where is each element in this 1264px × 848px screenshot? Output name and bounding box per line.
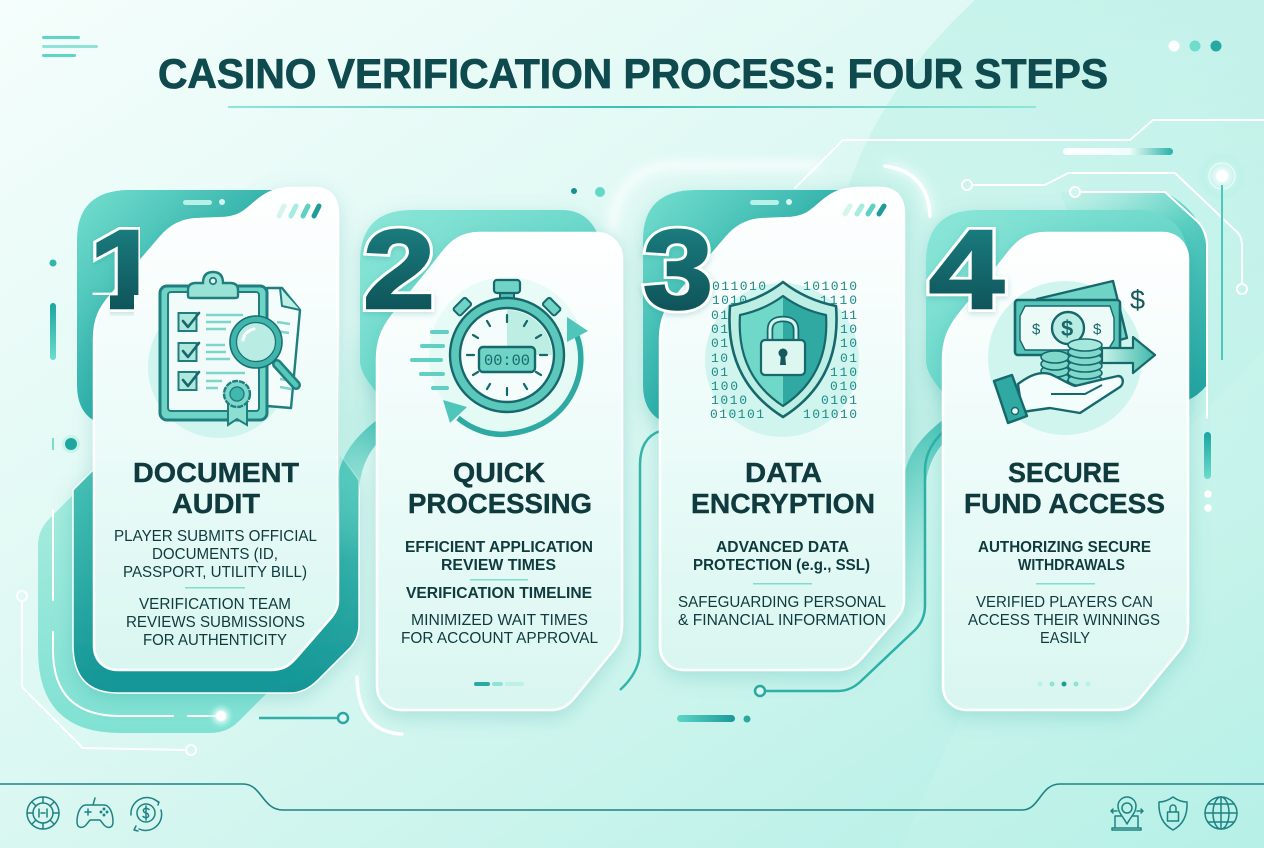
step 1 description: PASSPORT, UTILITY BILL): [123, 564, 307, 581]
step 1 dark frame: [73, 440, 359, 693]
step 2 pager: [474, 682, 524, 686]
step 3 wave soft fill: [904, 320, 951, 478]
bottom frame line: [0, 784, 1264, 810]
step 3 description: [678, 539, 886, 629]
step 1 stripes: [279, 206, 319, 216]
icon: shield with padlock and binary: 10: [840, 336, 857, 351]
step 2 back frame: [360, 210, 600, 420]
step 1 top pill: [183, 199, 225, 205]
icon: shield with padlock and binary: 1010: [712, 293, 747, 308]
icon: dollar cycle: [131, 798, 162, 831]
step 2 description: REVIEW TIMES: [441, 557, 556, 574]
icon: shield with padlock and binary: 01: [840, 351, 857, 366]
step 1 number: [92, 227, 140, 316]
step 3 top pill: [750, 199, 792, 205]
icon: shield with padlock and binary: 011010: [712, 279, 766, 294]
step 2 number: 2: [363, 207, 435, 332]
step 4 number: 4: [929, 207, 1004, 332]
step 3 heading: DATA: [745, 457, 822, 488]
step 1 description: REVIEWS SUBMISSIONS: [126, 614, 305, 631]
icon: money, coins and hand: $: [1032, 321, 1041, 338]
step 3 connector node: [755, 686, 765, 696]
left decorations: [50, 260, 80, 453]
step 1 heading: AUDIT: [172, 488, 260, 519]
bottom pill under card 3: [677, 715, 750, 722]
icon: shield with padlock and binary: 110: [830, 365, 857, 380]
icon: globe: [1205, 797, 1237, 829]
step 4 description: EASILY: [1040, 630, 1090, 647]
icon: shield with padlock and binary: 01: [711, 322, 728, 337]
icon: shield with padlock and binary: 10: [840, 322, 857, 337]
step 1 description: PLAYER SUBMITS OFFICIAL: [114, 528, 317, 545]
icon: shield with padlock and binary: 11: [841, 308, 857, 323]
step 4 number: 4: [929, 207, 1004, 332]
icon: money, coins and hand: [988, 281, 1155, 435]
step 3 card: [660, 188, 904, 670]
icon: money, coins and hand: $: [1093, 321, 1102, 338]
icon: stopwatch: 00:00: [484, 352, 530, 370]
top-right dots: [1168, 40, 1222, 52]
step 2 description: MINIMIZED WAIT TIMES: [411, 612, 588, 629]
step 3 number: 3: [643, 207, 713, 332]
step 4 description: WITHDRAWALS: [1018, 557, 1125, 574]
step 2 panel: [338, 207, 622, 710]
step 4 back frame: [926, 210, 1188, 414]
step 2 description: VERIFICATION TIMELINE: [406, 585, 592, 602]
connector: card 2 to card 3: [620, 431, 660, 690]
step 1 number: 1: [89, 207, 161, 332]
icon: shield with padlock and binary: 101010: [803, 279, 857, 294]
icon: shield with padlock and binary: 10: [711, 351, 728, 366]
step 2 description: FOR ACCOUNT APPROVAL: [401, 630, 598, 647]
step 4 description: VERIFIED PLAYERS CAN: [976, 594, 1153, 611]
step 3 heading: [691, 457, 875, 519]
step 3 stripes: [845, 206, 884, 214]
step 4 circuit outline: [1081, 192, 1207, 418]
title: CASINO VERIFICATION PROCESS: FOUR STEPS: [158, 50, 1108, 97]
connector: bottom center nodes: [259, 677, 402, 734]
step 3 panel: [643, 188, 961, 696]
step 2 heading: PROCESSING: [408, 488, 592, 519]
step 1 description: FOR AUTHENTICITY: [143, 632, 287, 649]
step 3 description: PROTECTION (e.g., SSL): [693, 557, 870, 574]
step 4 card: [943, 233, 1188, 710]
icon: shield with padlock and binary: 101010: [803, 407, 857, 422]
circuit lines: upper right: [795, 120, 1264, 294]
icon: shield with padlock and binary: 010: [830, 379, 857, 394]
step 4 outer right frame: [1060, 192, 1207, 400]
icon: money, coins and hand: $: [1061, 316, 1073, 341]
step 1 heading: [133, 457, 299, 519]
icon: casino chip: [27, 797, 59, 829]
step 3 top frame: [643, 190, 866, 430]
step 4 description: ACCESS THEIR WINNINGS: [968, 612, 1160, 629]
step 3 connector: [765, 425, 951, 691]
icon: location on laptop: [1111, 797, 1143, 830]
step 1 description: [114, 528, 317, 649]
icon: shield with padlock and binary: 0101: [821, 393, 857, 408]
step 3 description: ADVANCED DATA: [716, 539, 849, 556]
step 1 heading: DOCUMENT: [133, 457, 299, 488]
step 3 number: 3: [643, 207, 713, 332]
step 2 description: EFFICIENT APPLICATION: [405, 539, 593, 556]
icon: shield with padlock and binary: 1010: [711, 393, 747, 408]
step 2 card: [377, 233, 622, 710]
right decorations: [1204, 432, 1212, 512]
step 2 wave soft fill: [338, 320, 385, 478]
icon: shield lock: [1159, 797, 1187, 830]
step 3 heading: ENCRYPTION: [691, 488, 875, 519]
step 4 panel: [926, 187, 1207, 710]
icon: shield with padlock and binary: 1110: [820, 293, 857, 308]
step 3 wave band: [904, 414, 961, 630]
step 1 description: DOCUMENTS (ID,: [152, 546, 278, 563]
icon: shield with padlock and binary: [705, 279, 859, 437]
step 2 heading: QUICK: [453, 457, 545, 488]
glow arcs around card 3: [571, 165, 930, 232]
step 4 heading: FUND ACCESS: [964, 488, 1165, 519]
step 1 number: 1: [89, 207, 161, 332]
step 4 circuit node: [1070, 187, 1080, 197]
title underline: [228, 106, 1036, 108]
step 1 top frame: [77, 190, 300, 430]
icon: shield with padlock and binary: 010101: [710, 407, 764, 422]
step 1 circuit lines: [17, 510, 235, 755]
icon: shield with padlock and binary: 01: [711, 365, 728, 380]
step 3 description: & FINANCIAL INFORMATION: [678, 612, 886, 629]
step 2 wave band: [338, 414, 395, 560]
top-left menu icon: [42, 36, 98, 57]
step 1 panel: [17, 188, 359, 755]
step 1 light back shape: [38, 488, 300, 733]
step 4 heading: SECURE: [1008, 457, 1120, 488]
step 4 pager: [1038, 682, 1090, 686]
icon: clipboard with magnifier: [148, 272, 300, 438]
glowing node: upper right: [1198, 152, 1246, 360]
step 1 description: VERIFICATION TEAM: [139, 596, 291, 613]
step 1 card: [94, 188, 338, 670]
icon: shield with padlock and binary: 01: [711, 308, 728, 323]
step 2 number: 2: [363, 207, 435, 332]
step 4 heading: [964, 457, 1165, 519]
step 2 heading: [408, 457, 592, 519]
icon: shield with padlock and binary: 100: [711, 379, 738, 394]
icon: stopwatch: [412, 277, 588, 434]
icon: shield with padlock and binary: 01: [711, 336, 728, 351]
step 3 description: SAFEGUARDING PERSONAL: [678, 594, 886, 611]
step 4 description: AUTHORIZING SECURE: [978, 539, 1151, 556]
step 4 description: [968, 539, 1160, 647]
icon: game controller: [77, 798, 113, 827]
step 2 description: [401, 539, 598, 647]
icon: money, coins and hand: $: [1130, 285, 1145, 315]
